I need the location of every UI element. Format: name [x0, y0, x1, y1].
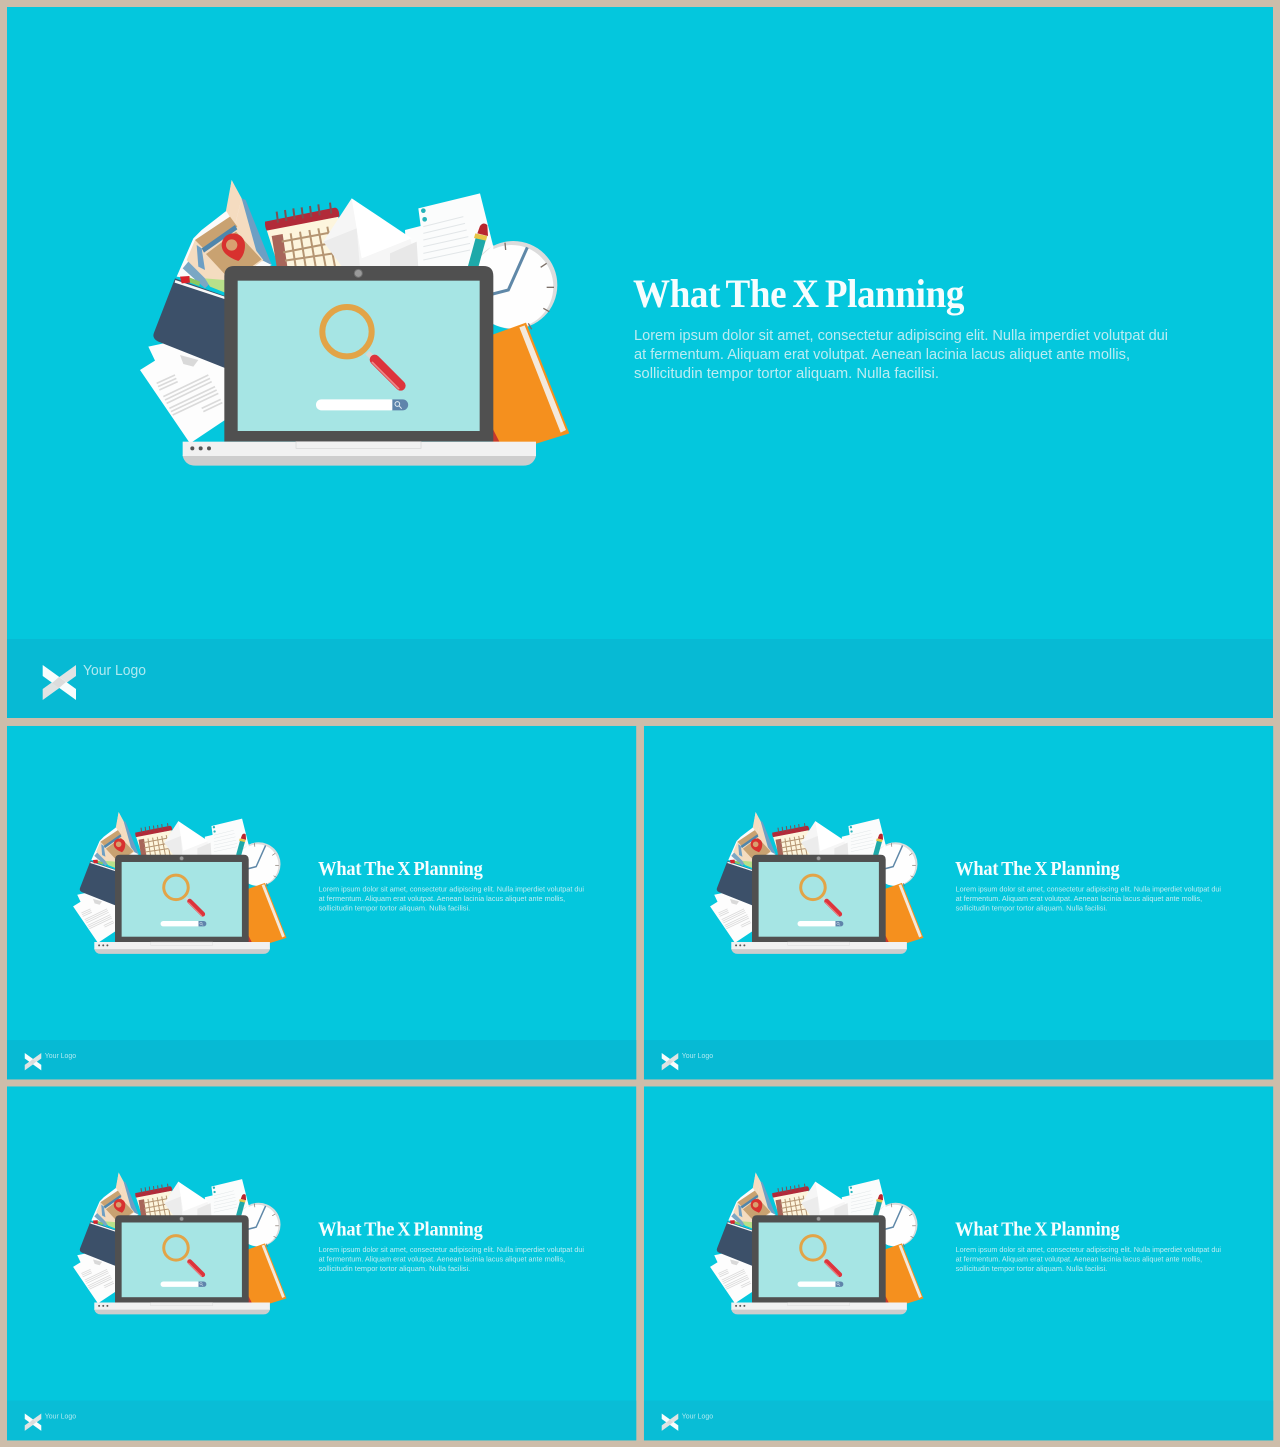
icon: orange book	[492, 323, 569, 447]
slide background	[7, 1086, 636, 1440]
body text: Lorem ipsum dolor sit amet, consectetur adipiscing elit. Nulla imperdiet volutpat dui	[319, 1245, 584, 1254]
search bar	[316, 399, 408, 410]
footer band	[7, 1401, 636, 1440]
title: What The X Planning	[633, 271, 964, 316]
logo mark	[25, 1414, 41, 1431]
body text: at fermentum. Aliquam erat volutpat. Aenean lacinia lacus aliquet ante mollis,	[956, 894, 1202, 903]
slide background	[7, 7, 1273, 718]
body text	[319, 884, 584, 912]
footer band	[644, 1401, 1273, 1440]
logo mark	[662, 1053, 678, 1070]
body text: sollicitudin tempor tortor aliquam. Nulla facilisi.	[634, 365, 939, 382]
footer band	[7, 1040, 636, 1079]
icon: lined paper	[405, 193, 495, 268]
body text: sollicitudin tempor tortor aliquam. Nulla facilisi.	[956, 1264, 1107, 1273]
icon: pencil	[468, 224, 488, 268]
body text: sollicitudin tempor tortor aliquam. Nulla facilisi.	[319, 903, 470, 912]
panel: small slide top left	[7, 726, 636, 1079]
body text: at fermentum. Aliquam erat volutpat. Aenean lacinia lacus aliquet ante mollis,	[319, 1254, 565, 1263]
icon: dark folder	[153, 276, 232, 370]
body text: at fermentum. Aliquam erat volutpat. Aenean lacinia lacus aliquet ante mollis,	[956, 1254, 1202, 1263]
logo text: Your Logo	[45, 1051, 76, 1060]
footer band	[644, 1040, 1273, 1079]
title: What The X Planning	[955, 858, 1120, 880]
icon: envelope	[323, 198, 418, 268]
icon: wall calendar	[265, 203, 345, 267]
body text	[319, 1245, 584, 1273]
slide background	[7, 726, 636, 1079]
body text	[956, 1245, 1221, 1273]
logo text: Your Logo	[45, 1411, 76, 1420]
panel: small slide top right	[644, 726, 1273, 1079]
logo mark	[662, 1414, 678, 1431]
icon: laptop	[183, 266, 536, 466]
title: What The X Planning	[318, 858, 483, 880]
body text: at fermentum. Aliquam erat volutpat. Aenean lacinia lacus aliquet ante mollis,	[319, 894, 565, 903]
illustration: laptop with office items	[140, 180, 569, 466]
panel: small slide bottom right	[644, 1086, 1273, 1440]
title: What The X Planning	[318, 1219, 483, 1241]
footer band	[7, 639, 1273, 718]
body text	[634, 327, 1168, 382]
illustration: laptop with office items	[710, 812, 923, 954]
illustration: laptop with office items	[73, 1172, 286, 1314]
body text: Lorem ipsum dolor sit amet, consectetur adipiscing elit. Nulla imperdiet volutpat dui	[634, 327, 1168, 344]
body text: at fermentum. Aliquam erat volutpat. Aenean lacinia lacus aliquet ante mollis,	[634, 346, 1130, 363]
body text: sollicitudin tempor tortor aliquam. Nulla facilisi.	[956, 903, 1107, 912]
icon: document sheets	[140, 330, 230, 443]
body text: sollicitudin tempor tortor aliquam. Nulla facilisi.	[319, 1264, 470, 1273]
logo mark	[43, 665, 76, 700]
logo mark	[25, 1053, 41, 1070]
panel: small slide bottom left	[7, 1086, 636, 1440]
slide background	[644, 726, 1273, 1079]
icon: folded map	[177, 180, 272, 293]
title: What The X Planning	[955, 1219, 1120, 1241]
laptop lid	[224, 266, 493, 442]
illustration: laptop with office items	[710, 1172, 923, 1314]
logo text: Your Logo	[682, 1411, 713, 1420]
body text	[956, 884, 1221, 912]
body text: Lorem ipsum dolor sit amet, consectetur adipiscing elit. Nulla imperdiet volutpat dui	[956, 884, 1221, 893]
laptop screen	[238, 281, 480, 431]
body text: Lorem ipsum dolor sit amet, consectetur adipiscing elit. Nulla imperdiet volutpat dui	[956, 1245, 1221, 1254]
logo text: Your Logo	[83, 662, 146, 679]
laptop base	[183, 442, 536, 466]
camera	[354, 269, 362, 277]
logo text: Your Logo	[682, 1051, 713, 1060]
panel: large slide	[7, 7, 1273, 718]
body text: Lorem ipsum dolor sit amet, consectetur adipiscing elit. Nulla imperdiet volutpat dui	[319, 884, 584, 893]
slide background	[644, 1086, 1273, 1440]
icon: magnifying glass	[322, 307, 401, 389]
illustration: laptop with office items	[73, 812, 286, 954]
icon: clock	[469, 241, 557, 329]
